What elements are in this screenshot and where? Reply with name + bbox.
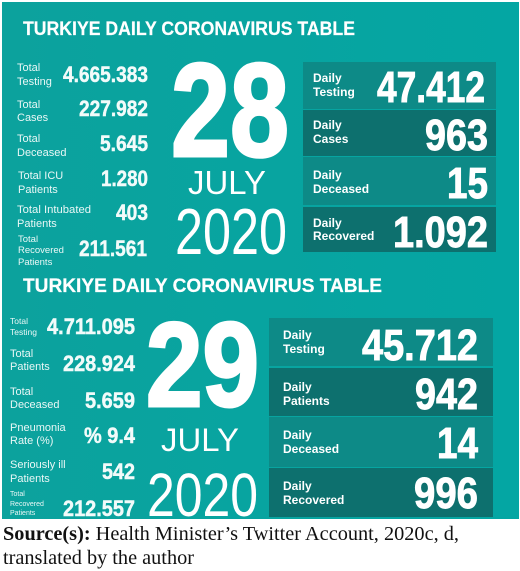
- stat: total recovered patients: Total: [10, 491, 25, 498]
- stat: total intubated patients: 403: [116, 200, 148, 225]
- daily cases row: [303, 110, 496, 160]
- stat: total recovered patients: Patients: [18, 257, 53, 268]
- daily cases row: Daily: [313, 118, 342, 132]
- stat: total recovered patients: [18, 234, 147, 268]
- stat: seriously ill patients: 542: [102, 459, 135, 484]
- stat: total testing: Testing: [10, 327, 37, 337]
- stat: total recovered patients: Recovered: [18, 245, 64, 256]
- stat: total testing: Total: [10, 316, 28, 326]
- stat: total cases: [17, 96, 148, 124]
- daily testing row: Testing: [313, 85, 355, 99]
- stat: total recovered patients: Total: [18, 234, 38, 245]
- date: 28 July 2020: 28: [171, 37, 289, 185]
- daily recovered row: [269, 468, 493, 518]
- stat: total ICU patients: Total ICU: [18, 170, 63, 182]
- stat: total patients: Patients: [10, 361, 50, 373]
- stat: total testing: [17, 62, 148, 88]
- stat: total testing: 4.711.095: [47, 314, 135, 339]
- date: 28 July 2020: 2020: [175, 195, 287, 268]
- date: 29 July 2020: [146, 298, 259, 529]
- stat: total intubated patients: Patients: [17, 218, 57, 230]
- title: TURKIYE DAILY CORONAVIRUS TABLE: [23, 19, 355, 40]
- stat: total recovered patients: 211.561: [79, 236, 147, 261]
- stat: total intubated patients: [17, 200, 148, 230]
- stat: total deceased: Deceased: [10, 399, 60, 411]
- daily testing row: [303, 62, 496, 112]
- stat: seriously ill patients: Patients: [10, 473, 50, 485]
- stat: total ICU patients: Patients: [18, 184, 58, 196]
- daily testing row: Daily: [283, 328, 312, 342]
- stat: total deceased: 5.659: [85, 388, 135, 413]
- panel: 28 July table: [17, 19, 496, 268]
- date: 29 July 2020: 29: [146, 298, 259, 432]
- stat: total deceased: 5.645: [100, 131, 148, 156]
- stat: total recovered patients: [10, 491, 135, 521]
- stat: total recovered patients: Patients: [10, 510, 36, 517]
- daily recovered row: [303, 207, 496, 257]
- date: 28 July 2020: [171, 37, 289, 268]
- daily recovered row: Daily: [313, 216, 342, 230]
- stat: seriously ill patients: Seriously ill: [10, 459, 66, 471]
- stat: total testing: 4.665.383: [63, 62, 148, 87]
- stat: pneumonia rate: [10, 422, 136, 448]
- stat: pneumonia rate: % 9.4: [84, 423, 136, 448]
- stat: total testing: [10, 314, 135, 339]
- daily deceased row: [269, 417, 493, 468]
- daily testing row: 45.712: [362, 321, 478, 370]
- stat: total ICU patients: [18, 166, 148, 196]
- stat: total testing: Total: [17, 62, 40, 74]
- daily patients row: Daily: [283, 380, 312, 394]
- stat: total patients: Total: [10, 348, 33, 360]
- stat: seriously ill patients: [10, 459, 135, 485]
- daily deceased row: [303, 157, 496, 208]
- daily testing row: Testing: [283, 342, 325, 356]
- daily recovered row: Recovered: [283, 493, 344, 507]
- daily recovered row: 996: [414, 469, 478, 518]
- stat: pneumonia rate: Pneumonia: [10, 422, 67, 434]
- daily testing row: 47.412: [377, 63, 485, 112]
- stat: total deceased: [10, 386, 135, 413]
- daily recovered row: Recovered: [313, 229, 374, 243]
- stat: total cases: Total: [17, 99, 40, 111]
- stat: total patients: [10, 348, 136, 376]
- stat: total cases: 227.982: [79, 96, 148, 121]
- daily deceased row: Deceased: [283, 442, 339, 456]
- daily recovered row: 1.092: [393, 208, 488, 257]
- daily cases row: 963: [425, 111, 488, 160]
- stat: total deceased: Total: [17, 133, 40, 145]
- date: 28 July 2020: JULY: [188, 164, 266, 201]
- daily patients row: [269, 368, 493, 419]
- daily deceased row: 14: [437, 419, 478, 468]
- date: 29 July 2020: 2020: [147, 461, 258, 529]
- daily testing row: [269, 318, 493, 370]
- stat: total intubated patients: Total Intubated: [17, 204, 91, 216]
- stat: total recovered patients: 212.557: [63, 496, 135, 521]
- daily patients row: Patients: [283, 394, 330, 408]
- daily cases row: Cases: [313, 132, 349, 146]
- stat: total cases: Cases: [17, 112, 49, 124]
- stat: total ICU patients: 1.280: [101, 166, 148, 191]
- daily deceased row: Daily: [283, 428, 312, 442]
- stat: pneumonia rate: Rate (%): [10, 435, 53, 447]
- stat: total deceased: [17, 131, 148, 159]
- date: 29 July 2020: JULY: [161, 422, 239, 458]
- source note: translated by the author: [3, 547, 194, 569]
- stat: total deceased: Total: [10, 386, 33, 398]
- title: TURKIYE DAILY CORONAVIRUS TABLE: [23, 276, 382, 297]
- daily deceased row: Deceased: [313, 182, 369, 196]
- daily testing row: Daily: [313, 71, 342, 85]
- daily patients row: 942: [415, 370, 478, 419]
- daily deceased row: 15: [447, 159, 488, 208]
- source note: Source(s): Health Minister’s Twitter Account, 2020c, d,: [3, 523, 459, 545]
- daily recovered row: Daily: [283, 479, 312, 493]
- source note: [3, 523, 459, 569]
- stat: total deceased: Deceased: [17, 147, 67, 159]
- panel: 29 July table: [10, 276, 493, 529]
- stat: total patients: 228.924: [63, 351, 136, 376]
- stat: total testing: Testing: [17, 76, 52, 88]
- daily deceased row: Daily: [313, 168, 342, 182]
- stat: total recovered patients: Recovered: [10, 501, 44, 508]
